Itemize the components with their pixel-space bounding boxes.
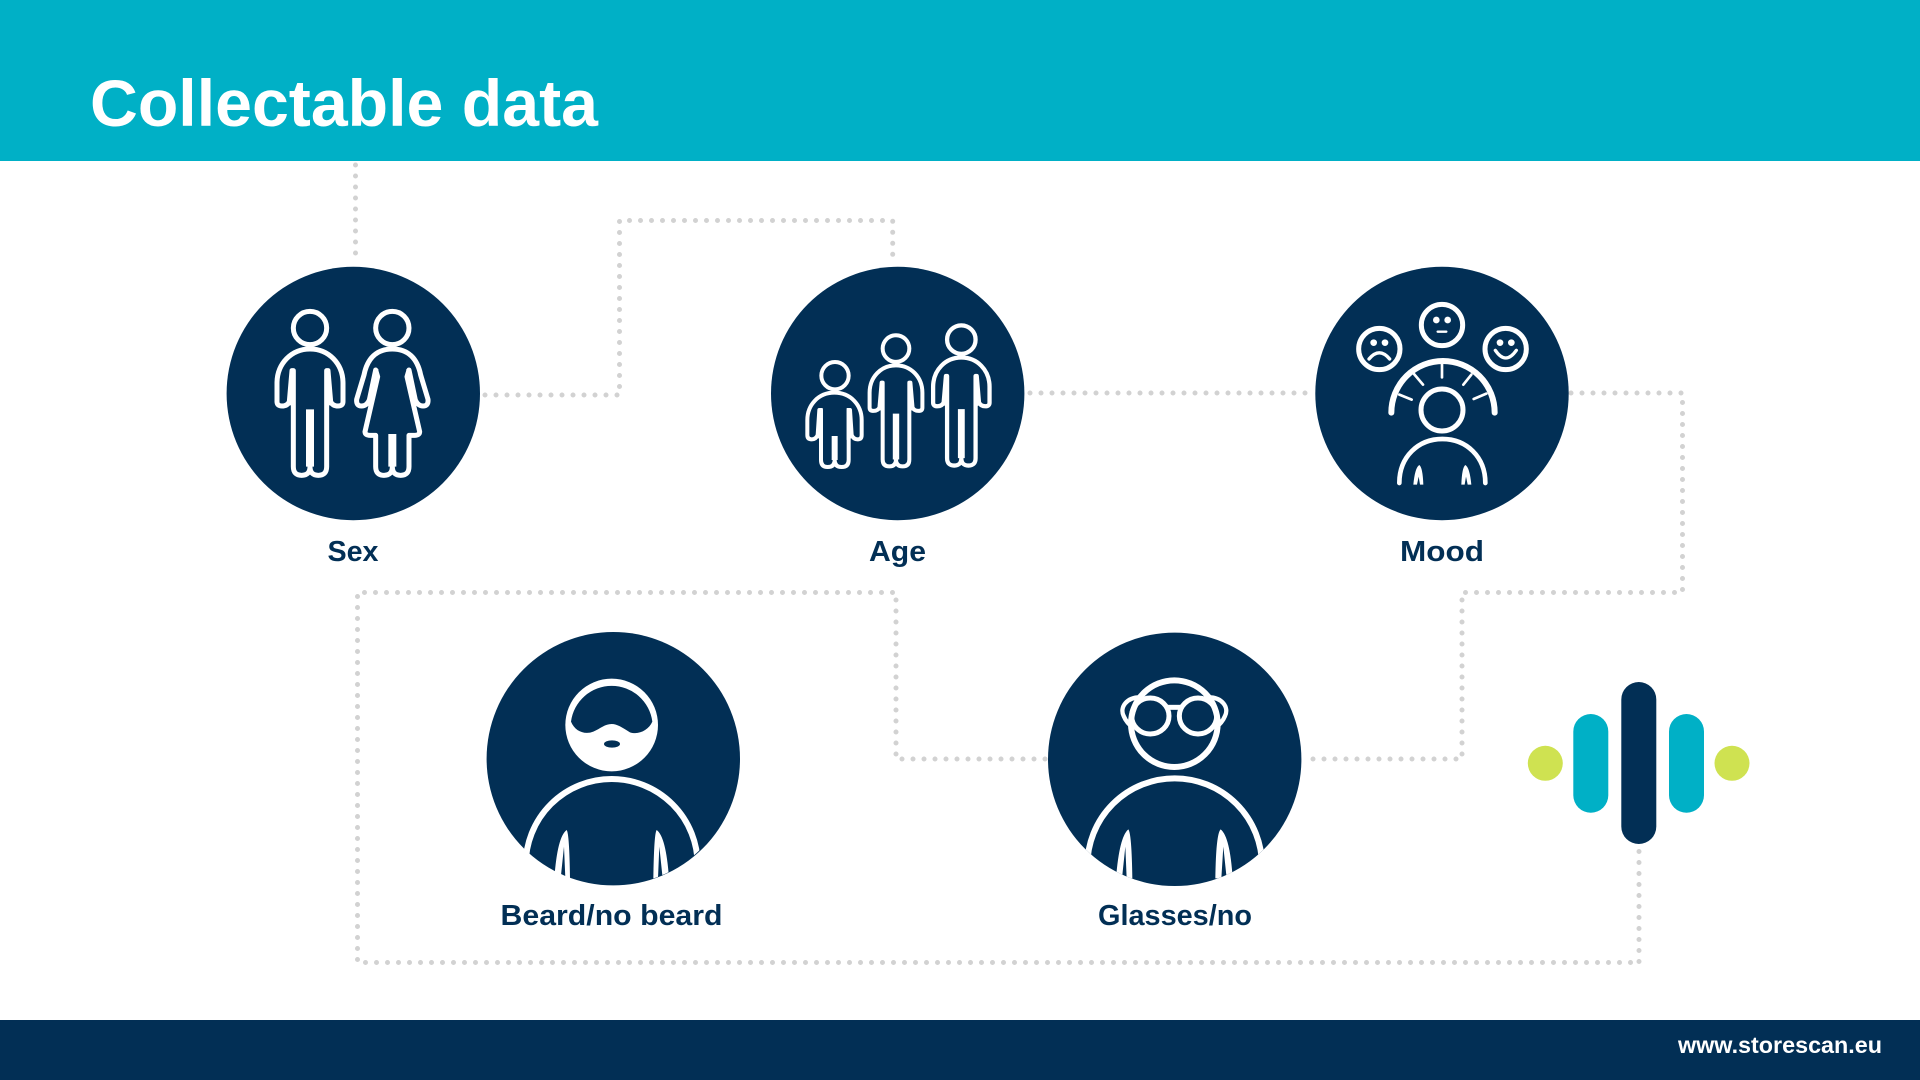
panel: glasses [1048, 633, 1301, 932]
label: mood: Mood [1400, 536, 1484, 568]
icon: person with glasses [1087, 680, 1262, 878]
panel: beard [487, 632, 740, 932]
icon: person [1399, 389, 1485, 485]
icon: child [807, 362, 862, 467]
glasses head and frames [1122, 680, 1226, 767]
label: beard: Beard/no beard [500, 900, 722, 932]
panel: age [771, 267, 1024, 568]
dotted connector network [356, 165, 1682, 962]
icon: gauge [1391, 361, 1495, 413]
age circle [771, 267, 1024, 520]
icon: happy face [1485, 328, 1526, 370]
panel: mood [1315, 267, 1569, 568]
beard head [565, 679, 658, 771]
icon: sad face [1359, 328, 1400, 370]
beard circle [487, 632, 740, 885]
glasses body [1087, 778, 1262, 878]
icon: teenager [870, 335, 922, 466]
icon: mood gauge and faces [1359, 304, 1526, 485]
icon: adult [933, 325, 990, 466]
panel: sex [227, 267, 480, 568]
icon: man [277, 311, 343, 475]
label: age: Age [869, 536, 926, 568]
footer url: www.storescan.eu [1677, 1032, 1882, 1058]
sex circle [227, 267, 480, 520]
icon: neutral face [1421, 304, 1463, 346]
footer band [0, 1020, 1920, 1080]
mood circle [1315, 267, 1569, 520]
icon: bearded person [526, 679, 698, 878]
icon: man and woman [277, 311, 428, 475]
label: sex: Sex [328, 536, 378, 568]
icon: three figures by age [807, 325, 990, 467]
glasses circle [1048, 633, 1301, 886]
title: Collectable data [90, 66, 599, 140]
beard body [526, 779, 698, 878]
header band [0, 0, 1920, 161]
icon: storescan logo [1528, 682, 1750, 844]
icon: woman [357, 311, 428, 475]
label: glasses: Glasses/no [1098, 900, 1252, 932]
